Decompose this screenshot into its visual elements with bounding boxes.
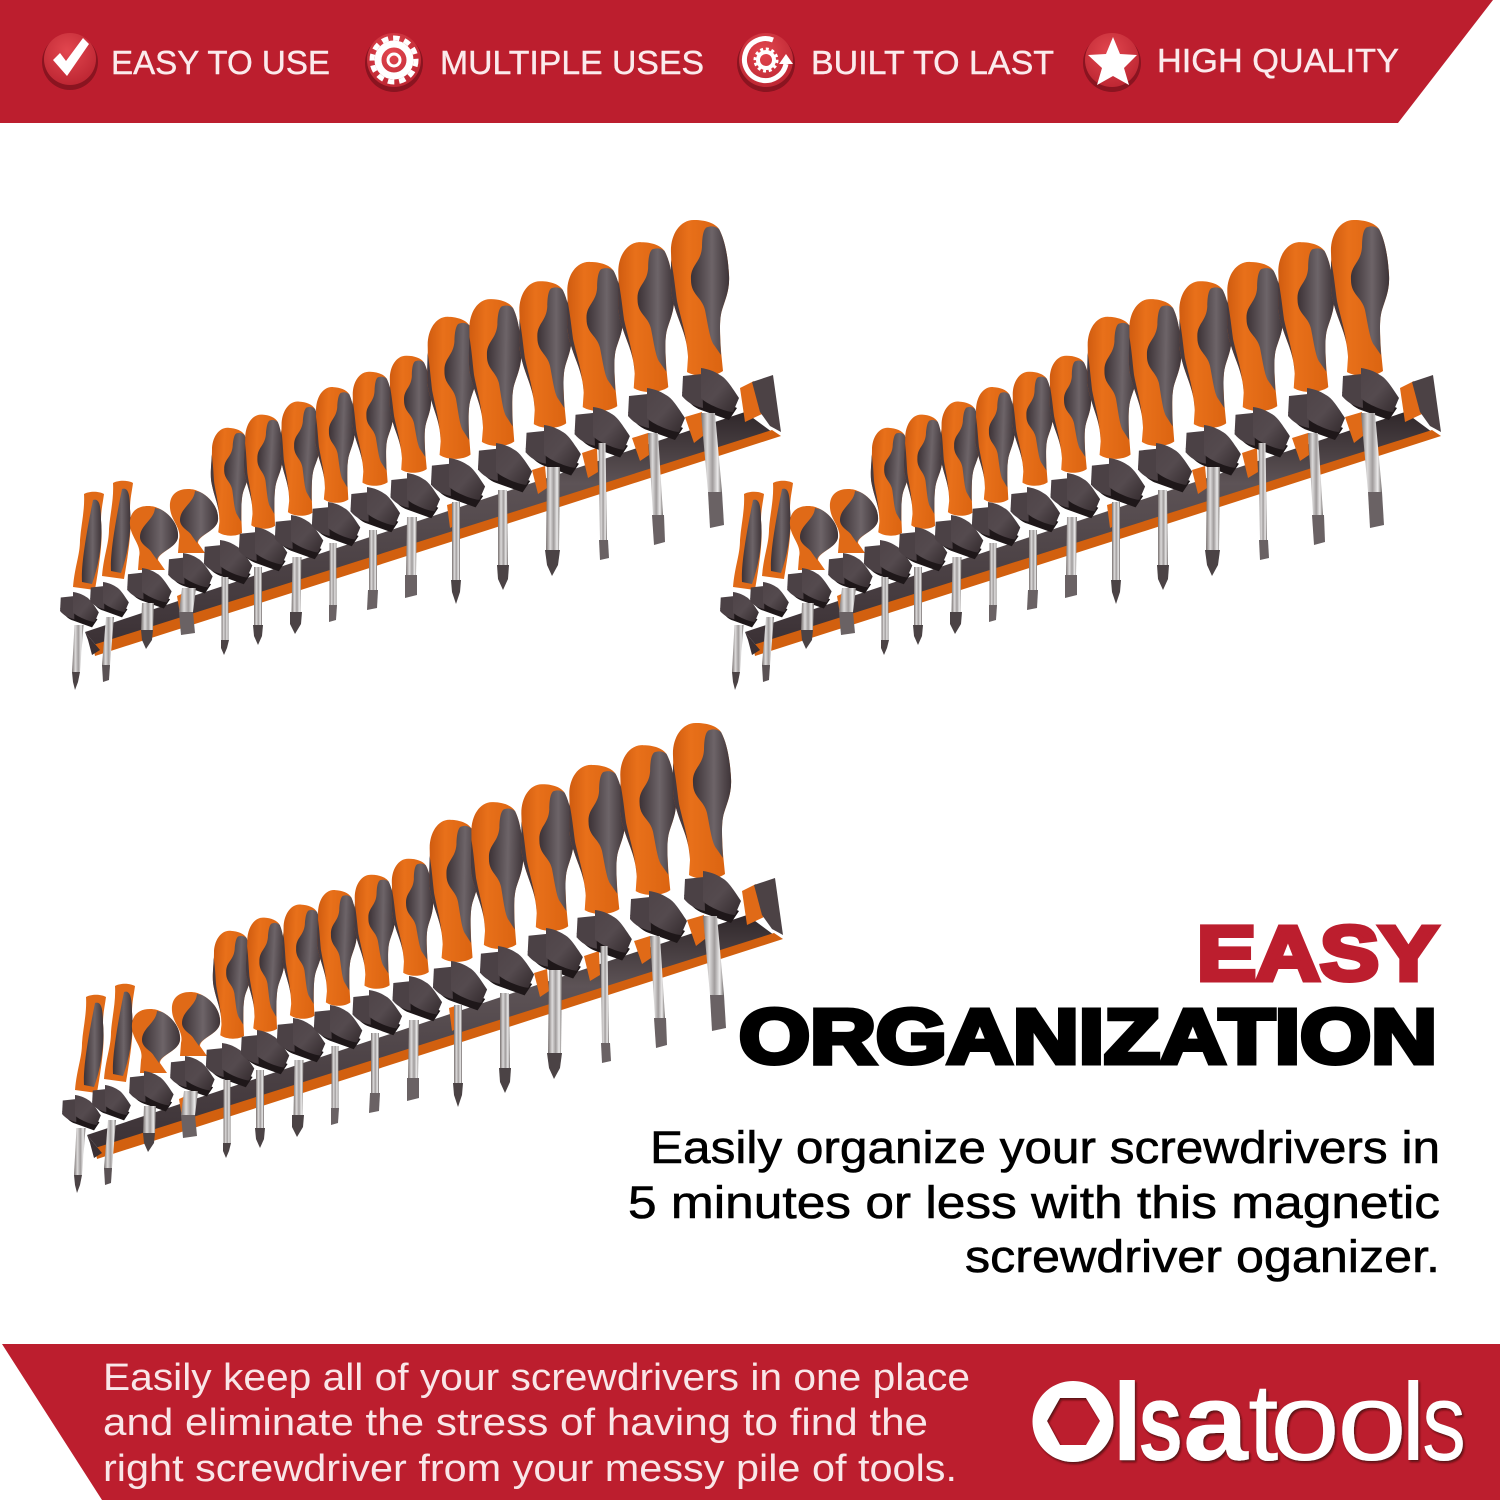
heading: organization: ORGANIZATION [739,994,1437,1080]
logo: Olsatools: s [1422,1361,1466,1484]
description text: 5 minutes or less with this magnetic [628,1177,1440,1228]
screwdriver rack: lower left [62,723,783,1193]
screwdriver 9 [350,371,400,610]
logo: Olsatools: o [1270,1361,1340,1484]
screwdriver 3 [127,506,178,649]
screwdriver 4 [168,489,218,635]
icon: gear with circular arrow [737,33,795,92]
top banner [0,0,1493,123]
screwdriver 5 [204,427,252,655]
screwdriver 13 [519,281,581,576]
screwdriver 8 [312,387,360,622]
label: built to last: BUILT TO LAST [811,44,1054,81]
label: easy to use: EASY TO USE [111,44,330,81]
icon: star [1083,33,1141,92]
screwdriver 1 [60,492,104,690]
label: high quality: HIGH QUALITY [1157,42,1399,79]
screwdriver rack: upper left [60,220,781,690]
banner text: Easily keep all of your screwdrivers in one place [103,1357,970,1399]
icon: check [42,33,98,90]
logo: Olsatools [1033,1361,1466,1484]
screwdriver 14 [567,262,630,560]
logo: Olsatools: t [1248,1361,1279,1484]
icon: gear [365,33,423,92]
screwdriver 10 [390,356,440,598]
logo: Olsatools: s [1138,1361,1183,1484]
description text [628,1122,1440,1282]
screwdriver rack: upper right [720,220,1441,690]
screwdriver 15 [618,242,685,545]
logo: Olsatools: l [1112,1361,1143,1484]
screwdriver 7 [275,401,323,634]
description text: screwdriver oganizer. [965,1231,1440,1282]
screwdriver 2 [90,481,133,682]
bottom banner [2,1344,1500,1500]
logo: Olsatools: l [1401,1361,1425,1484]
logo: Olsatools: a [1183,1361,1249,1484]
screwdriver 11 [426,316,485,604]
heading: easy: EASY [1197,911,1438,997]
label: multiple uses: MULTIPLE USES [440,44,704,81]
banner text: right screwdriver from your messy pile of tools. [103,1448,957,1490]
screwdriver 12 [467,299,532,590]
description text: Easily organize your screwdrivers in [650,1122,1440,1173]
banner text: and eliminate the stress of having to find the [103,1402,928,1444]
magnetic rail [85,375,781,656]
banner text [103,1357,970,1490]
logo: Olsatools: o [1337,1361,1407,1484]
screwdriver 16 [671,220,739,528]
screwdriver 6 [239,414,287,645]
